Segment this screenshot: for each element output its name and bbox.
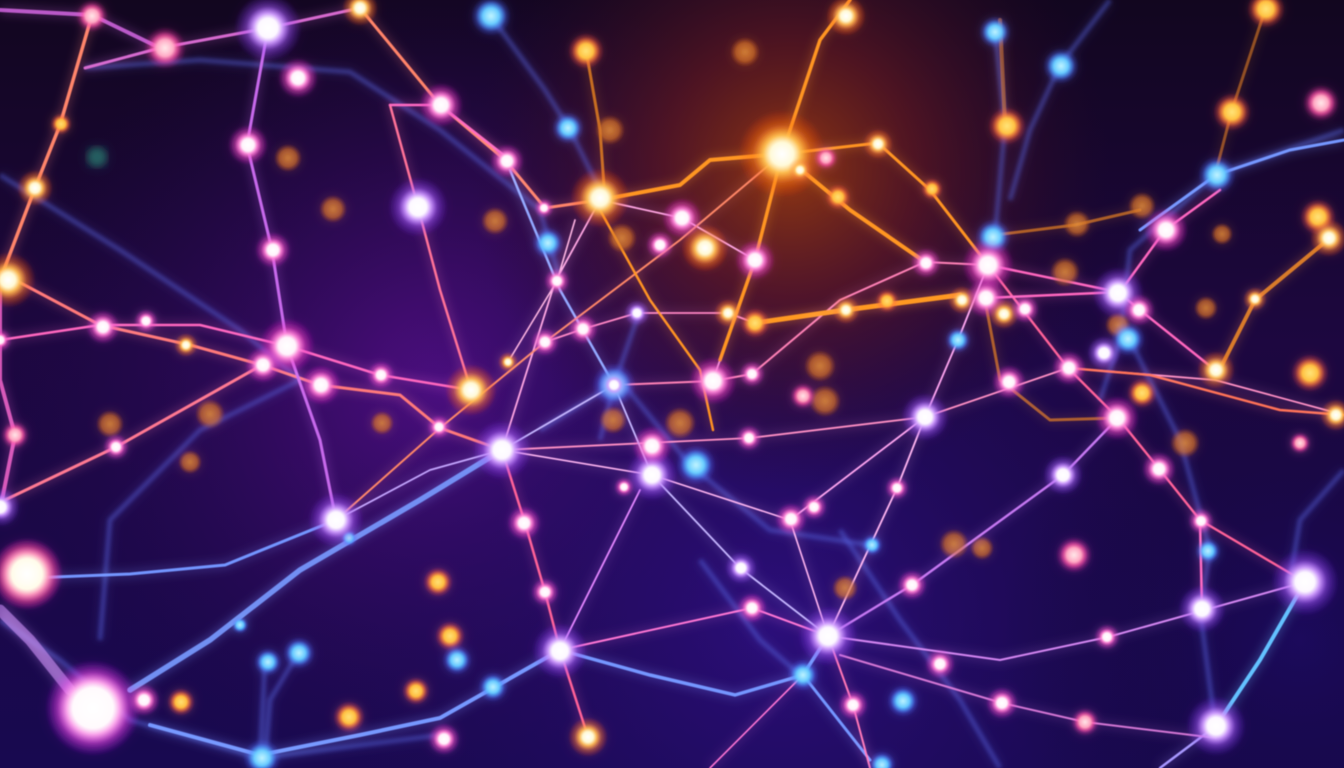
blue nodes xyxy=(231,0,1236,768)
orange nodes xyxy=(17,0,1344,573)
large glowing hub nodes xyxy=(0,110,826,756)
orange connections xyxy=(586,0,1344,430)
